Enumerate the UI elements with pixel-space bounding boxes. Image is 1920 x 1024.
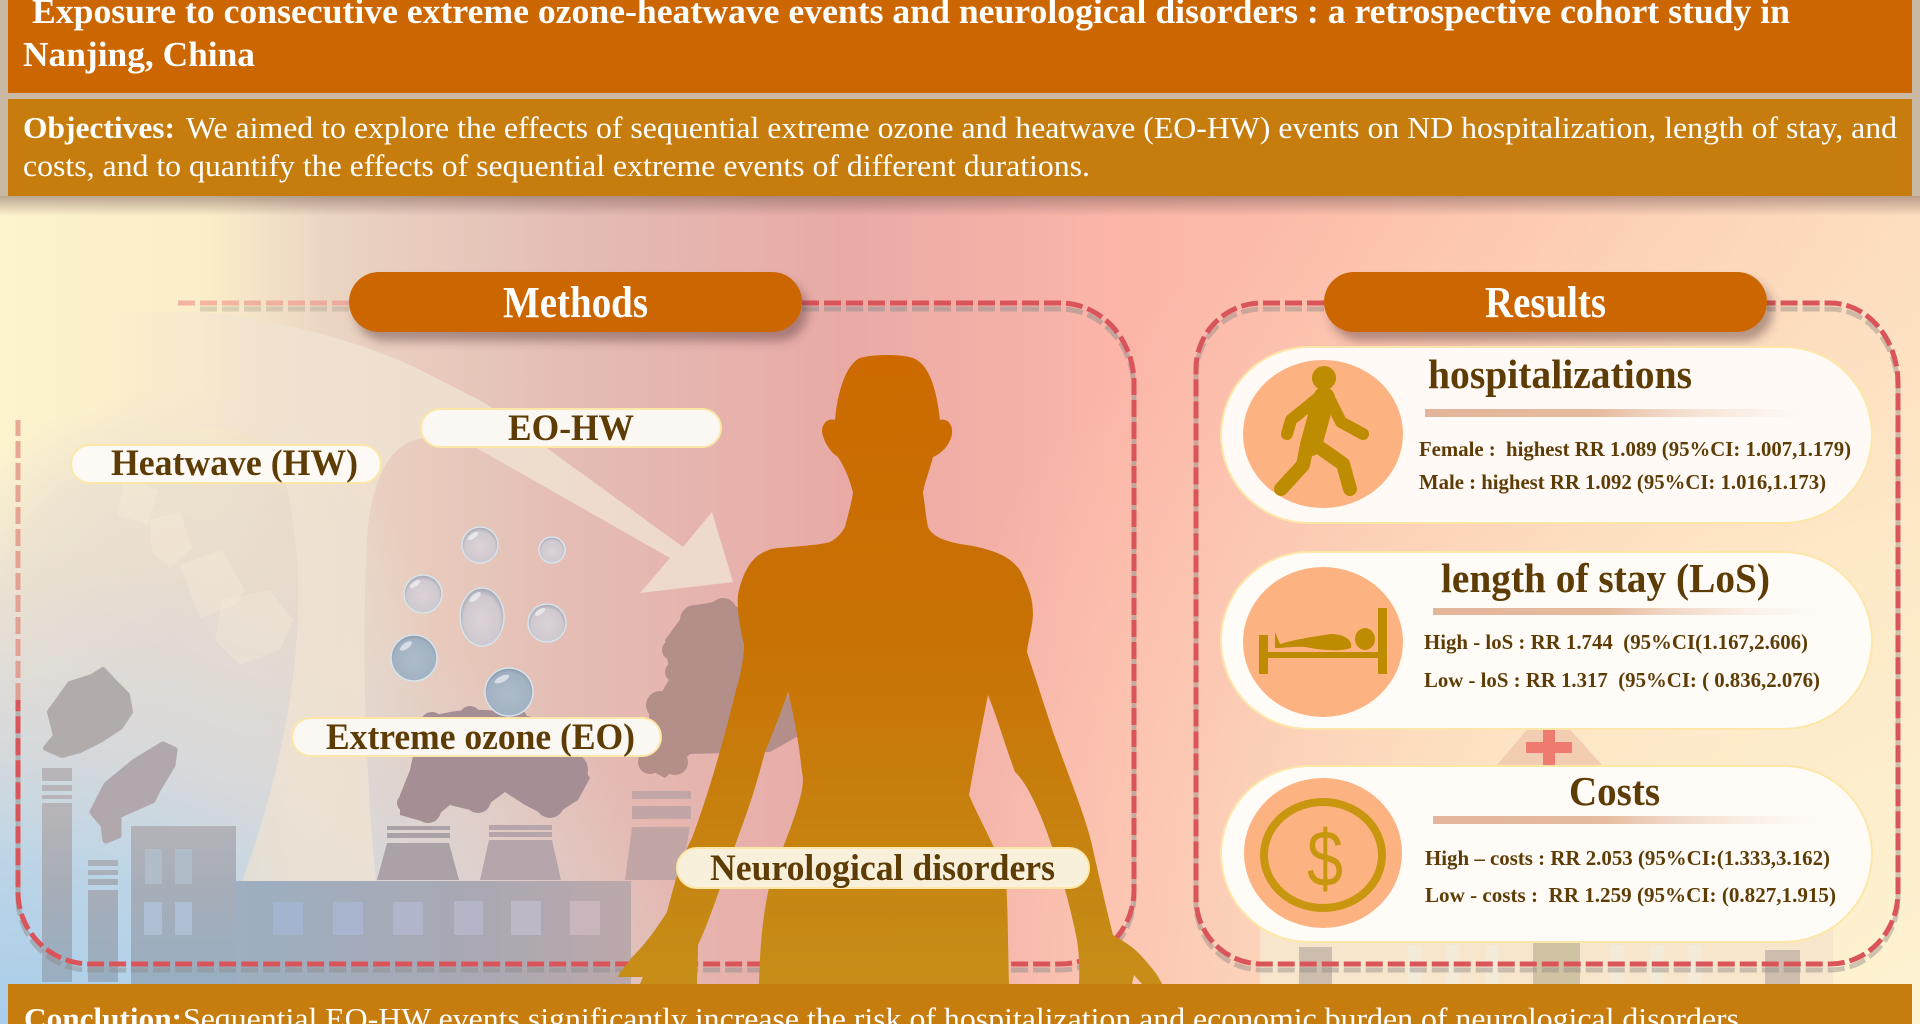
divider bar (1433, 608, 1820, 615)
label: Heatwave (HW): Heatwave (HW) (111, 443, 358, 484)
icon: dollar coin (1244, 778, 1402, 928)
result: low costs: Low - costs : RR 1.259 (95%CI: (0.827,1.915) (1425, 883, 1836, 907)
heading: Results: Results (1485, 278, 1606, 327)
divider bar (1425, 409, 1814, 417)
illustration: smoke clouds (46, 598, 800, 840)
illustration: heat plume and arrow (0, 312, 733, 881)
banner: objectives: We aimed to explore the effects of sequential extreme ozone and heatwave (EO-HW) events on ND hospitalization, length of stay, and (186, 110, 1898, 145)
divider bar (1433, 816, 1820, 824)
side margins behind banners (0, 0, 1920, 216)
icon: dollar coin: $ (1307, 814, 1343, 903)
label: EO-HW (421, 408, 721, 449)
result: female: Female : highest RR 1.089 (95%CI: 1.007,1.179) (1419, 437, 1851, 461)
smoke cloud left bottom (93, 745, 174, 840)
illustration: hexagons (118, 478, 293, 665)
banner: title: Nanjing, China (23, 35, 255, 74)
heading: length of stay (LoS): length of stay (LoS) (1441, 555, 1770, 601)
label: Neurological disorders: Neurological disorders (710, 848, 1055, 889)
panel frame: results dashed border (1196, 303, 1898, 970)
card: length of stay (1221, 552, 1872, 729)
card: costs (1221, 766, 1872, 942)
icon: bed (1243, 567, 1403, 717)
label: Extreme ozone (EO): Extreme ozone (EO) (326, 717, 635, 758)
smoke cloud center (397, 706, 590, 823)
panel frame: methods dashed border (18, 303, 1134, 970)
illustration: ozone bubbles (391, 527, 566, 716)
result: low LoS: Low - loS : RR 1.317 (95%CI: ( 0.836,2.076) (1424, 668, 1820, 692)
heading: Methods: Methods (503, 278, 648, 327)
icon: walking person (1243, 360, 1403, 508)
smoke cloud right (638, 598, 800, 778)
label: EO-HW: EO-HW (508, 408, 634, 449)
banner: title (8, 0, 1912, 93)
banner: conclusion (8, 984, 1912, 1024)
banner: objectives: costs, and to quantify the effects of sequential extreme events of different durations. (23, 148, 1090, 183)
result: high LoS: High - loS : RR 1.744 (95%CI(1.167,2.606) (1424, 630, 1808, 654)
heading: Methods (349, 272, 802, 332)
person silhouette (618, 355, 1162, 984)
heading: Results (1324, 272, 1767, 332)
heading: hospitalizations: hospitalizations (1428, 351, 1692, 397)
smoke cloud left top (46, 670, 130, 755)
result: male: Male : highest RR 1.092 (95%CI: 1.016,1.173) (1419, 470, 1826, 494)
banner: objectives (8, 99, 1912, 196)
banner: objectives: Objectives: (23, 110, 175, 145)
result: high costs: High – costs : RR 2.053 (95%CI:(1.333,3.162) (1425, 846, 1830, 870)
heading: Costs: Costs (1569, 768, 1660, 814)
illustration: factory (42, 768, 691, 984)
card: hospitalizations (1221, 347, 1872, 523)
illustration: hospital building behind results (1260, 705, 1833, 985)
